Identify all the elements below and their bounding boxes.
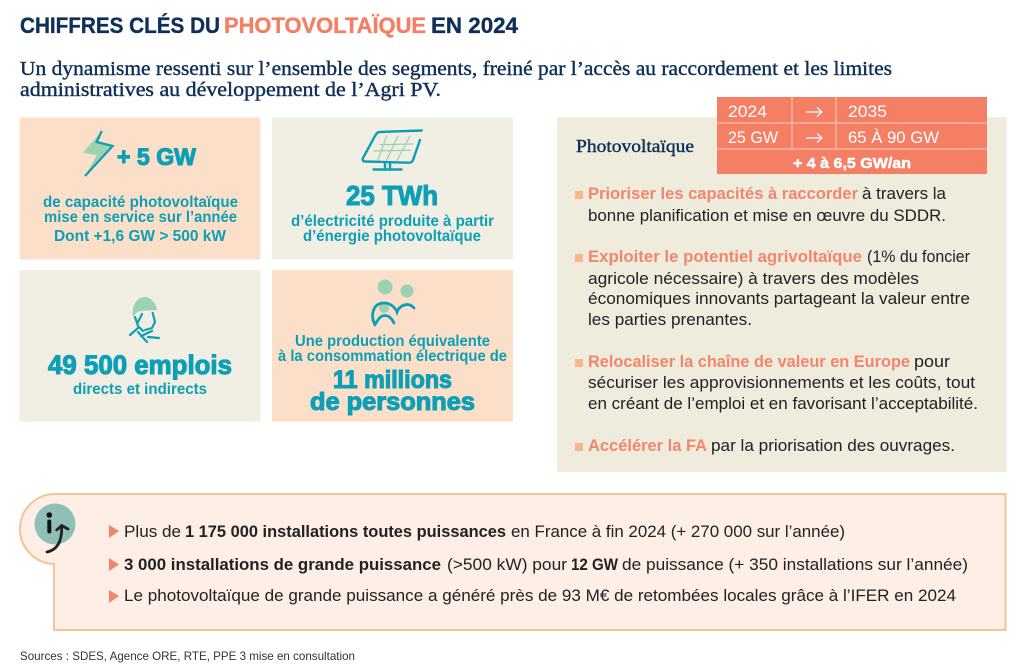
panel: emplois [20, 270, 260, 422]
bullet: accélérer la FA: par la priorisation des ouvrages. [711, 436, 955, 455]
description: capacité [43, 194, 238, 245]
bullet: accélérer la FA [575, 436, 955, 455]
stat: 11 millions de personnes: 11 millions [333, 366, 452, 394]
description: équivalence: à la consommation électrique de [278, 348, 507, 365]
table: trajectoire 2035: 25 GW [728, 128, 778, 147]
icon: solar panel [363, 130, 422, 170]
subtitle [20, 58, 892, 101]
line: grande puissance: (>500 kW) pour [447, 555, 567, 574]
sources: Sources : SDES, Agence ORE, RTE, PPE 3 mise en consultation [20, 649, 355, 663]
stat: +5 GW: + 5 GW [117, 144, 196, 171]
table: trajectoire 2035 [717, 97, 987, 174]
description: capacité: mise en service sur l’année [44, 209, 237, 226]
bullet: capacités à raccorder: bonne planification et mise en œuvre du SDDR. [588, 206, 946, 225]
description: équivalence: Une production équivalente [295, 333, 490, 350]
line: grande puissance: 12 GW [571, 555, 619, 574]
line: installations toutes puissances [109, 522, 845, 541]
title: EN 2024 [431, 13, 519, 38]
description: équivalence [278, 333, 507, 365]
bullet: potentiel agrivoltaïque: agricole nécessaire) à travers des modèles [588, 269, 919, 288]
bullet: relocaliser: Relocaliser la chaîne de valeur en Europe [588, 352, 910, 371]
panel: équivalence [272, 270, 513, 422]
title: PHOTOVOLTAÏQUE [224, 13, 426, 38]
bullet: capacités à raccorder [575, 184, 947, 225]
subtitle: Un dynamisme ressenti sur l’ensemble des segments, freiné par l’accès au raccordement et les limites [20, 58, 892, 80]
bullet: relocaliser: en créant de l’emploi et en favorisant l’acceptabilité. [588, 394, 978, 413]
stat: 11 millions de personnes [310, 366, 475, 416]
stat: 11 millions de personnes: de personnes [310, 388, 475, 416]
line: installations toutes puissances: en France à fin 2024 (+ 270 000 sur l’année) [511, 522, 845, 541]
description: production: d’électricité produite à partir [291, 213, 494, 230]
description: production [291, 213, 494, 245]
description: capacité: de capacité photovoltaïque [43, 194, 238, 211]
bullet: potentiel agrivoltaïque: les parties prenantes. [588, 310, 752, 329]
table: trajectoire 2035: + 4 à 6,5 GW/an [793, 155, 911, 172]
bullet: capacités à raccorder: à travers la [862, 184, 947, 203]
icon: lightning [83, 131, 113, 176]
bullet: potentiel agrivoltaïque [575, 247, 970, 329]
line: grande puissance [109, 555, 968, 574]
callout: installations [20, 494, 1006, 630]
panel: production 25 TWh [272, 118, 513, 260]
bullet: capacités à raccorder: Prioriser les capacités à raccorder [588, 184, 858, 203]
table: trajectoire 2035: 2035 [848, 102, 887, 121]
line: grande puissance: de puissance (+ 350 installations sur l’année) [622, 555, 968, 574]
bullet: accélérer la FA: Accélérer la FA [588, 436, 707, 455]
subtitle: administratives au développement de l’Agri PV. [20, 79, 441, 101]
panel: photovoltaïque priorités [557, 97, 1006, 472]
bullet: potentiel agrivoltaïque: (1% du foncier [867, 247, 970, 266]
bullet: relocaliser: pour [914, 352, 950, 371]
line: installations toutes puissances: Plus de [124, 522, 181, 541]
icon: worker with helmet [130, 297, 159, 342]
line: grande puissance: 3 000 installations de grande puissance [124, 555, 441, 574]
description: emplois: directs et indirects [73, 381, 207, 398]
icon: people [373, 280, 414, 325]
description: capacité: Dont +1,6 GW > 500 kW [54, 228, 227, 245]
stat: 25 TWh: 25 TWh [346, 180, 438, 211]
panel heading: Photovoltaïque [576, 136, 694, 156]
title: CHIFFRES CLÉS DU [20, 13, 220, 38]
stat: 49 500 emplois: 49 500 emplois [48, 350, 232, 380]
title [20, 13, 519, 38]
bullet: relocaliser [575, 352, 978, 413]
panel: capacité +5 GW [20, 118, 260, 260]
line: installations toutes puissances: 1 175 000 installations toutes puissances [185, 522, 506, 541]
bullet: potentiel agrivoltaïque: économiques innovants partageant la valeur entre [588, 289, 970, 308]
bullet: relocaliser: sécuriser les approvisionnements et les coûts, tout [588, 373, 975, 392]
table: trajectoire 2035: 65 À 90 GW [848, 128, 939, 147]
icon: info arrow [34, 504, 76, 552]
line: retombées locales: Le photovoltaïque de grande puissance a généré près de 93 M€ de retombées locales grâce à l’IFER en 2024 [124, 586, 956, 605]
description: production: d’énergie photovoltaïque [303, 228, 481, 245]
bullet: potentiel agrivoltaïque: Exploiter le potentiel agrivoltaïque [588, 247, 862, 266]
table: trajectoire 2035: 2024 [728, 102, 767, 121]
